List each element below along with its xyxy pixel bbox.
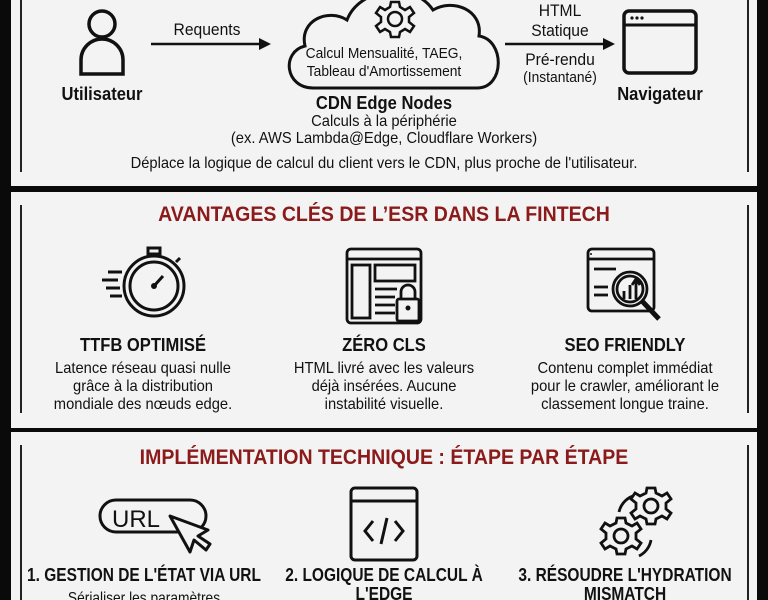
label: requents: Requents [174,20,240,39]
icon: gears [599,486,673,558]
panel: architecture: (Instantané) [523,69,597,86]
text: seo: classement longue traine. [541,396,709,413]
label: utilisateur: Utilisateur [62,84,142,104]
text: step 1: 1. GESTION DE L'ÉTAT VIA URL [27,565,261,585]
text: summary: Déplace la logique de calcul du client vers le CDN, plus proche de l'utilisateur. [131,155,637,172]
icon: browser [622,9,698,75]
label: html statique: HTML [539,1,581,20]
text: zero cls: ZÉRO CLS [342,335,426,355]
text: ttfb: TTFB OPTIMISÉ [80,335,206,355]
text: seo: SEO FRIENDLY [565,335,685,355]
text: ttfb: Latence réseau quasi nulle [55,360,231,377]
text: step 3 [518,564,732,600]
icon: seo magnifier [586,248,661,321]
text: ttfb: grâce à la distribution [73,378,213,395]
label: html statique: Statique [531,21,589,40]
icon: stopwatch [102,246,186,318]
text: cloud calcs [306,45,462,80]
text: zero cls: déjà insérées. Aucune [312,378,456,395]
text: ttfb [54,334,232,413]
text: zero cls: instabilité visuelle. [325,396,443,413]
panel: implementation [11,432,757,600]
text: cloud calcs: Tableau d'Amortissement [307,63,461,80]
text: zero cls [294,334,474,413]
arrow: html [505,38,615,50]
text: seo: Contenu complet immédiat [537,360,713,377]
text: step 2: 2. LOGIQUE DE CALCUL À [285,565,483,585]
icon: url cursor [98,498,212,554]
text: step 3: 3. RÉSOUDRE L'HYDRATION [518,565,732,585]
label: cdn edge nodes: CDN Edge Nodes [316,93,452,113]
icon: user [79,9,125,76]
heading: implementation: IMPLÉMENTATION TECHNIQUE : ÉTAPE PAR ÉTAPE [140,446,628,469]
panel: avantages [11,192,757,428]
panel: architecture [11,0,757,186]
arrow: requests [151,38,271,50]
label: html statique [531,1,589,40]
label: navigateur: Navigateur [617,84,703,104]
text: ttfb: mondiale des nœuds edge. [54,396,232,413]
text: cloud calcs: Calcul Mensualité, TAEG, [306,45,462,62]
text: step 2 [285,564,483,600]
label: cdn edge nodes [231,93,537,147]
text: step 1 [27,564,261,600]
icon: code window [350,486,418,562]
icon: cloud with gear [288,0,500,90]
label: cdn edge nodes: Calculs à la périphérie [311,113,457,130]
label: cdn edge nodes: (ex. AWS Lambda@Edge, Cloudflare Workers) [231,130,537,147]
label: pre-rendu: Pré-rendu [525,50,595,69]
text: seo [531,335,719,413]
text: seo: pour le crawler, améliorant le [531,378,719,395]
icon: url cursor: URL [112,506,160,533]
text: zero cls: HTML livré avec les valeurs [294,360,474,377]
heading: avantages: AVANTAGES CLÉS DE L’ESR DANS LA FINTECH [158,203,610,226]
icon: layout lock [346,248,422,324]
